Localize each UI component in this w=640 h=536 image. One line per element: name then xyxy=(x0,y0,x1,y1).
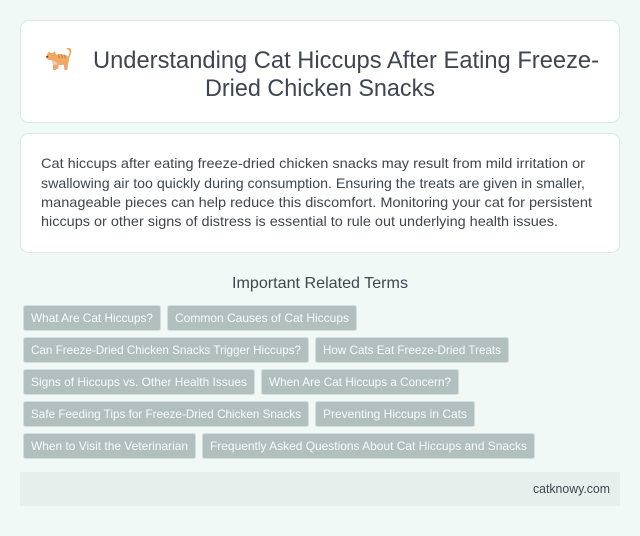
chip xyxy=(262,370,458,394)
heading: related terms: Important Related Terms xyxy=(232,275,408,292)
chip: Signs of Hiccups vs. Other Health Issues xyxy=(31,375,247,389)
text block: summary paragraph: Cat hiccups after eating freeze-dried chicken snacks may result from mild irritation or xyxy=(41,155,585,171)
title: Understanding Cat Hiccups After Eating Freeze- xyxy=(93,47,599,74)
chip: When to Visit the Veterinarian xyxy=(31,439,188,453)
text block: summary paragraph: hiccups or other signs of distress is essential to rule out underlying health issues. xyxy=(41,213,558,229)
chip xyxy=(316,338,508,362)
icon: cat xyxy=(46,48,71,70)
chip xyxy=(24,306,160,330)
chip xyxy=(202,434,534,458)
chip xyxy=(24,338,308,362)
text block: summary paragraph xyxy=(41,155,592,229)
chip xyxy=(168,306,356,330)
chip: Frequently Asked Questions About Cat Hiccups and Snacks xyxy=(210,439,527,453)
chip: Safe Feeding Tips for Freeze-Dried Chicken Snacks xyxy=(31,407,301,421)
title xyxy=(93,47,599,102)
text block: summary paragraph: manageable pieces can help reduce this discomfort. Monitoring your cat for persistent xyxy=(41,194,592,210)
chip: Common Causes of Cat Hiccups xyxy=(175,311,349,325)
chip xyxy=(24,434,196,458)
chip: Can Freeze-Dried Chicken Snacks Trigger Hiccups? xyxy=(31,343,301,357)
chip xyxy=(24,402,308,426)
panel: summary xyxy=(20,134,620,252)
title: Dried Chicken Snacks xyxy=(205,75,435,102)
chip: How Cats Eat Freeze-Dried Treats xyxy=(323,343,501,357)
chip xyxy=(24,370,254,394)
chip: When Are Cat Hiccups a Concern? xyxy=(269,375,451,389)
footer xyxy=(20,472,620,506)
chip: What Are Cat Hiccups? xyxy=(31,311,153,325)
panel: title card xyxy=(20,20,620,122)
chip: Preventing Hiccups in Cats xyxy=(323,407,467,421)
chip xyxy=(316,402,474,426)
panel: term chips xyxy=(24,306,534,458)
footer: catknowy.com xyxy=(533,482,610,496)
text block: summary paragraph: swallowing air too quickly during consumption. Ensuring the treats are given in smaller, xyxy=(41,175,585,191)
